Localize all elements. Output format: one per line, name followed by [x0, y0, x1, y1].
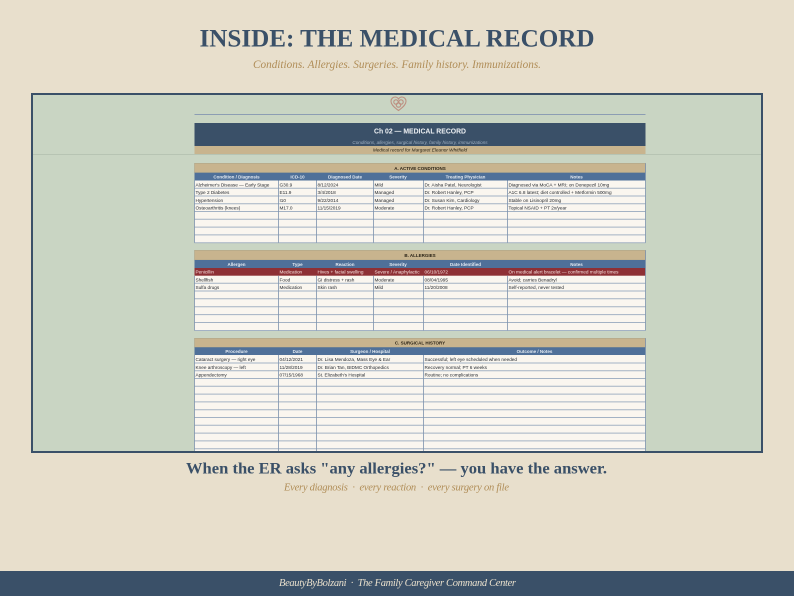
table: active conditions	[194, 163, 646, 243]
table: active conditions: G30.9	[280, 182, 293, 187]
tagline subtext: Every diagnosis · every reaction · every surgery on file	[283, 482, 509, 494]
table: active conditions: Condition / Diagnosis	[213, 174, 260, 179]
table: active conditions: 11/15/2019	[318, 206, 341, 210]
icon: heart with rings	[391, 97, 406, 110]
table: surgical history: Dr. Brian Tan, BIDMC Orthopedics	[318, 365, 389, 370]
chapter banner	[194, 123, 646, 154]
table: allergies: Allergen	[227, 262, 246, 267]
footer bar: BeautyByBolzani · The Family Caregiver Command Center	[279, 578, 517, 589]
table: allergies: Shellfish	[196, 277, 214, 282]
table: active conditions: Diagnosed via MoCA + MRI; on Donepezil 10mg	[508, 182, 610, 187]
tagline: When the ER asks "any allergies?" — you have the answer.	[186, 460, 607, 478]
table: allergies: B. ALLERGIES	[404, 253, 436, 258]
table: surgical history: 11/28/2019	[280, 365, 303, 370]
chapter banner: Ch 02 — MEDICAL RECORD	[374, 126, 466, 136]
table: surgical history	[194, 338, 646, 451]
table: allergies: Type	[292, 262, 303, 267]
table: surgical history: 07/15/1968	[280, 373, 303, 378]
highlighted row: penicillin: Penicillin	[196, 270, 214, 275]
table: allergies: Avoid; carries Benadryl	[508, 277, 557, 282]
table: active conditions: Mild	[374, 182, 383, 187]
table: surgical history: St. Elizabeth's Hospital	[318, 373, 365, 378]
table: allergies: Skin rash	[318, 285, 337, 290]
table: active conditions: Diagnosed Date	[328, 174, 362, 179]
table: allergies: Moderate	[374, 277, 395, 282]
table: active conditions: Osteoarthritis (knees)	[196, 206, 241, 210]
sheet contents	[194, 97, 646, 451]
table: active conditions: Stable on Lisinopril 20mg	[508, 198, 562, 203]
table: allergies: GI distress + rash	[318, 277, 355, 282]
table: active conditions: 9/22/2014	[318, 198, 339, 203]
table: active conditions: M17.0	[280, 206, 293, 210]
table: surgical history: 04/12/2021	[280, 357, 303, 362]
table: surgical history: Recovery normal; PT 6 weeks	[424, 365, 488, 370]
table: surgical history: Cataract surgery — right eye	[196, 357, 256, 362]
highlighted row: penicillin: On medical alert bracelet — confirmed multiple times	[508, 270, 619, 275]
table: active conditions: Notes	[570, 174, 583, 179]
table: surgical history: Dr. Lisa Mendoza, Mass Eye & Ear	[318, 357, 391, 362]
table: active conditions: Managed	[374, 190, 394, 195]
highlighted row: penicillin: Medication	[280, 270, 303, 275]
highlighted row: penicillin: Severe / Anaphylactic	[374, 270, 420, 275]
table: active conditions: Hypertension	[196, 198, 224, 203]
table: active conditions: Type 2 Diabetes	[196, 190, 230, 195]
highlighted row: penicillin: 06/10/1972	[424, 270, 448, 275]
table: active conditions: A1C 6.8 latest; diet controlled + Metformin 500mg	[508, 190, 612, 195]
highlighted row: penicillin: Hives + facial swelling	[318, 270, 364, 275]
table: active conditions: Dr. Aisha Patel, Neurologist	[424, 182, 482, 187]
table: surgical history: Outcome / Notes	[517, 349, 553, 354]
table: allergies: Sulfa drugs	[196, 285, 220, 290]
footer bar	[0, 571, 794, 596]
table: active conditions: I10	[280, 198, 286, 203]
table: active conditions: 8/12/2024	[318, 182, 339, 187]
title: INSIDE: THE MEDICAL RECORD	[200, 26, 594, 52]
table: active conditions: Alzheimer's Disease — Early Stage	[196, 182, 270, 187]
table: active conditions: Treating Physician	[446, 174, 486, 179]
table: allergies: Self-reported, never tested	[508, 285, 564, 290]
table: active conditions: A. ACTIVE CONDITIONS	[394, 166, 446, 171]
table: active conditions: 3/4/2018	[318, 190, 336, 195]
panel: medical record screenshot	[32, 94, 762, 452]
chapter banner: Conditions, allergies, surgical history, family history, immunizations	[352, 140, 488, 145]
table: active conditions: Dr. Susan Kim, Cardiology	[424, 198, 480, 203]
highlighted row: penicillin	[194, 268, 646, 276]
table: surgical history: Knee arthroscopy — left	[196, 365, 246, 370]
table: active conditions: Topical NSAID + PT 2x/year	[508, 206, 567, 210]
table: active conditions: Managed	[374, 198, 394, 203]
table: active conditions: E11.9	[280, 190, 292, 195]
table: allergies: 08/04/1995	[424, 277, 448, 282]
subtitle: Conditions. Allergies. Surgeries. Family history. Immunizations.	[253, 57, 541, 71]
table: allergies: Mild	[374, 285, 383, 290]
table: allergies: Severity	[389, 262, 407, 267]
table: active conditions: Dr. Robert Hanley, PCP	[424, 190, 474, 195]
table: active conditions: Severity	[389, 174, 407, 179]
table: surgical history: Appendectomy	[196, 373, 227, 378]
table: surgical history: Routine; no complications	[424, 373, 479, 378]
table: allergies	[194, 250, 646, 330]
table: allergies: Food	[280, 277, 291, 282]
table: surgical history: C. SURGICAL HISTORY	[395, 341, 445, 346]
table: allergies: Reaction	[335, 262, 355, 267]
table: active conditions: Moderate	[374, 206, 395, 210]
table: surgical history: Successful; left eye scheduled when needed	[424, 357, 517, 362]
table: surgical history: Date	[293, 349, 303, 354]
table: allergies: Date Identified	[450, 262, 481, 267]
table: allergies: Notes	[570, 262, 583, 267]
table: surgical history: Surgeon / Hospital	[350, 349, 390, 354]
table: surgical history: Procedure	[225, 349, 248, 354]
chapter banner: Medical record for Margaret Eleanor Whitfield	[373, 148, 468, 153]
table: allergies: 11/20/2008	[424, 285, 448, 290]
table: active conditions: Dr. Robert Hanley, PCP	[424, 206, 474, 210]
table: active conditions: ICD-10	[290, 174, 305, 179]
table: allergies: Medication	[280, 285, 303, 290]
